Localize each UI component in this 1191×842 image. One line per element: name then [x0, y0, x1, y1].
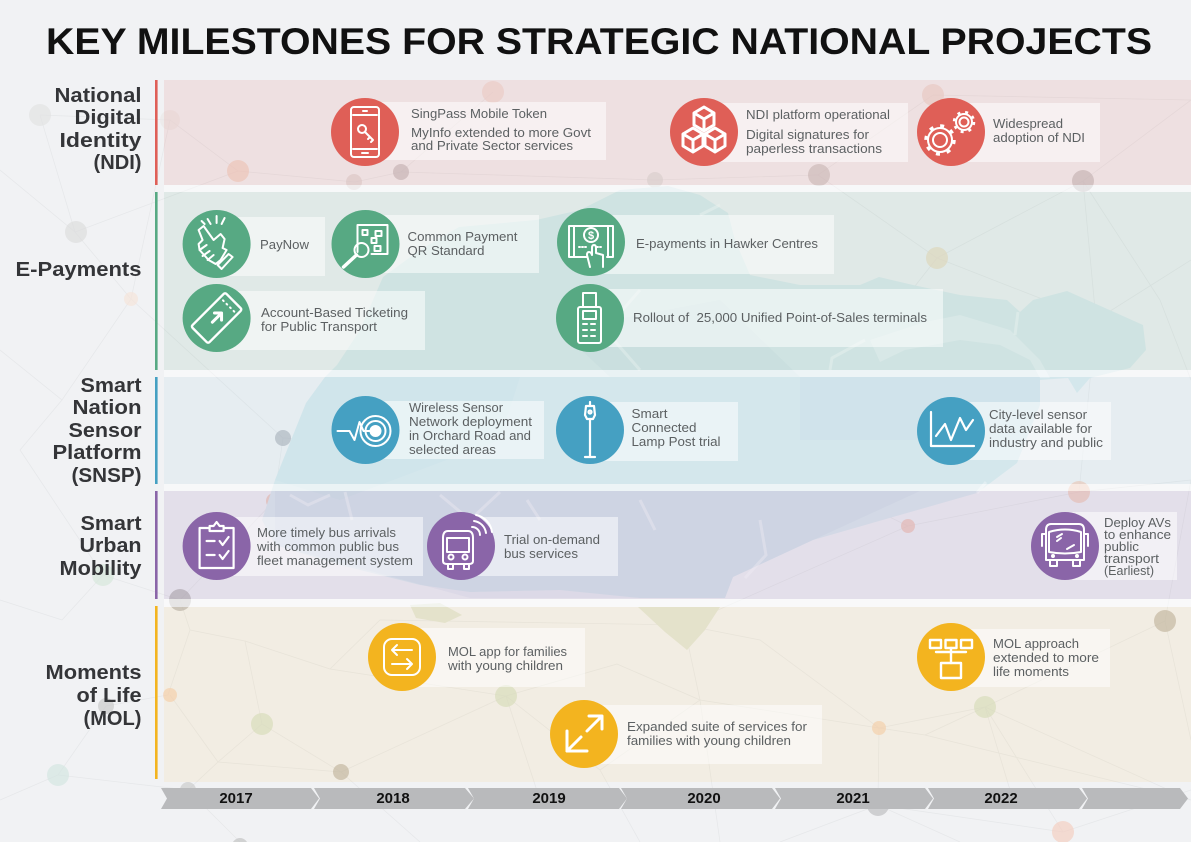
milestone: Smart lamp post: Lamp Post trial	[632, 434, 721, 449]
milestone: QR standard: Common Payment	[408, 229, 518, 244]
milestone: Deploy AVs: to enhance	[1104, 527, 1171, 542]
icon: QR and magnifier	[344, 225, 388, 267]
heading: SNSP: Sensor	[68, 419, 142, 442]
heading: NDI	[54, 84, 142, 174]
heading: Smart Urban Mobility: Smart	[80, 512, 142, 535]
milestone: Wireless sensor network: Wireless Sensor	[409, 400, 504, 415]
panel: Smart Urban Mobility	[60, 491, 1177, 599]
heading: E-Payments: E-Payments	[16, 258, 142, 281]
milestone: Deploy AVs	[1031, 512, 1177, 580]
milestone: NDI platform: Digital signatures for	[746, 127, 870, 142]
icon: POS terminal	[578, 293, 601, 343]
panel: Moments of Life	[46, 606, 1110, 779]
milestone: Hawker centres	[557, 208, 834, 276]
heading: SNSP: (SNSP)	[72, 464, 142, 487]
timeline: years: 2017	[219, 790, 253, 807]
milestone: MOL approach	[917, 623, 1110, 691]
timeline: years: 2022	[984, 790, 1018, 807]
timeline: years	[161, 788, 1188, 809]
milestone: Expanded suite: families with young children	[627, 733, 791, 748]
milestone: Account-based ticketing	[183, 284, 425, 352]
milestone: NDI platform: NDI platform operational	[746, 107, 890, 122]
category bands	[164, 80, 1191, 782]
icon: expand arrows	[567, 716, 602, 751]
milestone: MOL approach: MOL approach	[993, 636, 1079, 651]
milestone: SingPass: SingPass Mobile Token	[411, 106, 547, 121]
timeline: years: 2020	[687, 790, 721, 807]
icon: line chart	[931, 412, 974, 446]
milestone: QR standard: QR Standard	[408, 243, 484, 258]
heading: MOL: Moments	[46, 661, 142, 684]
heading: NDI: Identity	[60, 129, 142, 152]
icon: exchange arrows	[384, 639, 420, 675]
milestone: Widespread adoption: Widespread	[993, 116, 1063, 131]
heading: SNSP: Platform	[52, 441, 142, 464]
milestone: Expanded suite	[550, 700, 822, 768]
icon: lamp post	[585, 402, 595, 457]
milestone: Bus arrivals: with common public bus	[256, 539, 400, 554]
milestone: Deploy AVs: transport	[1104, 551, 1159, 566]
panel: Smart Nation Sensor Platform	[52, 374, 1111, 487]
milestone: Deploy AVs: public	[1104, 539, 1140, 554]
heading: Smart Urban Mobility	[60, 512, 142, 580]
milestone: PayNow: PayNow	[260, 237, 310, 252]
milestone: Account-based ticketing: Account-Based Ticketing	[261, 305, 408, 320]
heading: NDI: National	[54, 84, 142, 107]
milestone: QR standard	[332, 210, 539, 278]
icon: tablet and hand: $	[588, 230, 594, 242]
icon: clipboard	[200, 522, 234, 568]
milestone: On-demand bus: bus services	[504, 546, 579, 561]
milestone: PayNow	[183, 210, 325, 278]
milestone: NDI platform: paperless transactions	[746, 141, 883, 156]
milestone: SingPass	[331, 98, 606, 166]
heading: MOL: (MOL)	[84, 707, 142, 730]
milestone: Unified POS	[556, 284, 943, 352]
title: KEY MILESTONES FOR STRATEGIC NATIONAL PROJECTS	[46, 21, 1152, 62]
timeline: years: 2019	[532, 790, 566, 807]
milestone: Deploy AVs: (Earliest)	[1104, 563, 1154, 578]
milestone: Widespread adoption	[917, 98, 1100, 166]
milestone: MOL app: MOL app for families	[448, 644, 567, 659]
heading: NDI: Digital	[74, 106, 142, 129]
icon: bus with signal	[443, 515, 492, 569]
milestone: Account-based ticketing: for Public Transport	[261, 319, 377, 334]
milestone: SingPass: and Private Sector services	[411, 138, 574, 153]
map silhouette	[262, 186, 1146, 650]
milestone: City-level sensor data: industry and public	[989, 435, 1104, 450]
milestone: Deploy AVs: Deploy AVs	[1104, 515, 1171, 530]
icon: finger snap hand	[199, 216, 233, 269]
heading: SNSP	[52, 374, 142, 487]
milestone: Smart lamp post: Smart	[632, 406, 668, 421]
milestone: Smart lamp post: Connected	[632, 420, 696, 435]
milestone: Wireless sensor network: selected areas	[409, 442, 497, 457]
milestone: Hawker centres: E-payments in Hawker Centres	[636, 236, 818, 251]
heading: MOL: of Life	[76, 684, 142, 707]
icon: org chart	[930, 640, 972, 678]
icon: phone with key	[351, 107, 379, 157]
milestone: Bus arrivals: fleet management system	[257, 553, 413, 568]
heading: SNSP: Smart	[80, 374, 142, 397]
timeline: years: 2021	[836, 790, 870, 807]
milestone: SingPass: MyInfo extended to more Govt	[411, 125, 591, 140]
panel: National Digital Identity	[54, 80, 1100, 185]
milestone: City-level sensor data	[917, 397, 1111, 465]
icon: autonomous bus front	[1042, 524, 1088, 566]
timeline: years: 2018	[376, 790, 410, 807]
heading: MOL	[46, 661, 142, 730]
milestone: MOL app	[368, 623, 585, 691]
icon: tablet and hand	[569, 226, 613, 267]
milestone: MOL approach: life moments	[993, 664, 1070, 679]
milestone: On-demand bus: Trial on-demand	[504, 532, 600, 547]
icon: ticket	[191, 293, 242, 343]
milestone: Wireless sensor network: in Orchard Road and	[409, 428, 531, 443]
milestone: Smart lamp post	[556, 396, 738, 464]
panel: E-Payments	[16, 192, 943, 370]
heading: NDI: (NDI)	[94, 151, 142, 174]
milestone: Wireless sensor network: Network deployment	[409, 414, 532, 429]
milestone: Expanded suite: Expanded suite of services for	[627, 719, 808, 734]
milestone: Bus arrivals: More timely bus arrivals	[257, 525, 396, 540]
milestone: Unified POS: Rollout of 25,000 Unified Point-of-Sales terminals	[633, 310, 928, 325]
milestone: Bus arrivals	[183, 512, 423, 580]
milestone: City-level sensor data: data available for	[989, 421, 1093, 436]
heading: SNSP: Nation	[72, 396, 142, 419]
milestone: NDI platform	[670, 98, 908, 166]
milestone: Wireless sensor network	[332, 396, 544, 464]
heading: Smart Urban Mobility: Mobility	[60, 557, 142, 580]
icon: sensor target	[338, 416, 390, 446]
icon: gears	[926, 112, 974, 154]
milestone: On-demand bus	[427, 512, 618, 580]
heading: Smart Urban Mobility: Urban	[80, 534, 142, 557]
milestone: City-level sensor data: City-level sensor	[989, 407, 1088, 422]
milestone: MOL approach: extended to more	[993, 650, 1099, 665]
milestone: Widespread adoption: adoption of NDI	[993, 130, 1085, 145]
milestone: MOL app: with young children	[447, 658, 563, 673]
icon: three cubes	[683, 107, 725, 152]
